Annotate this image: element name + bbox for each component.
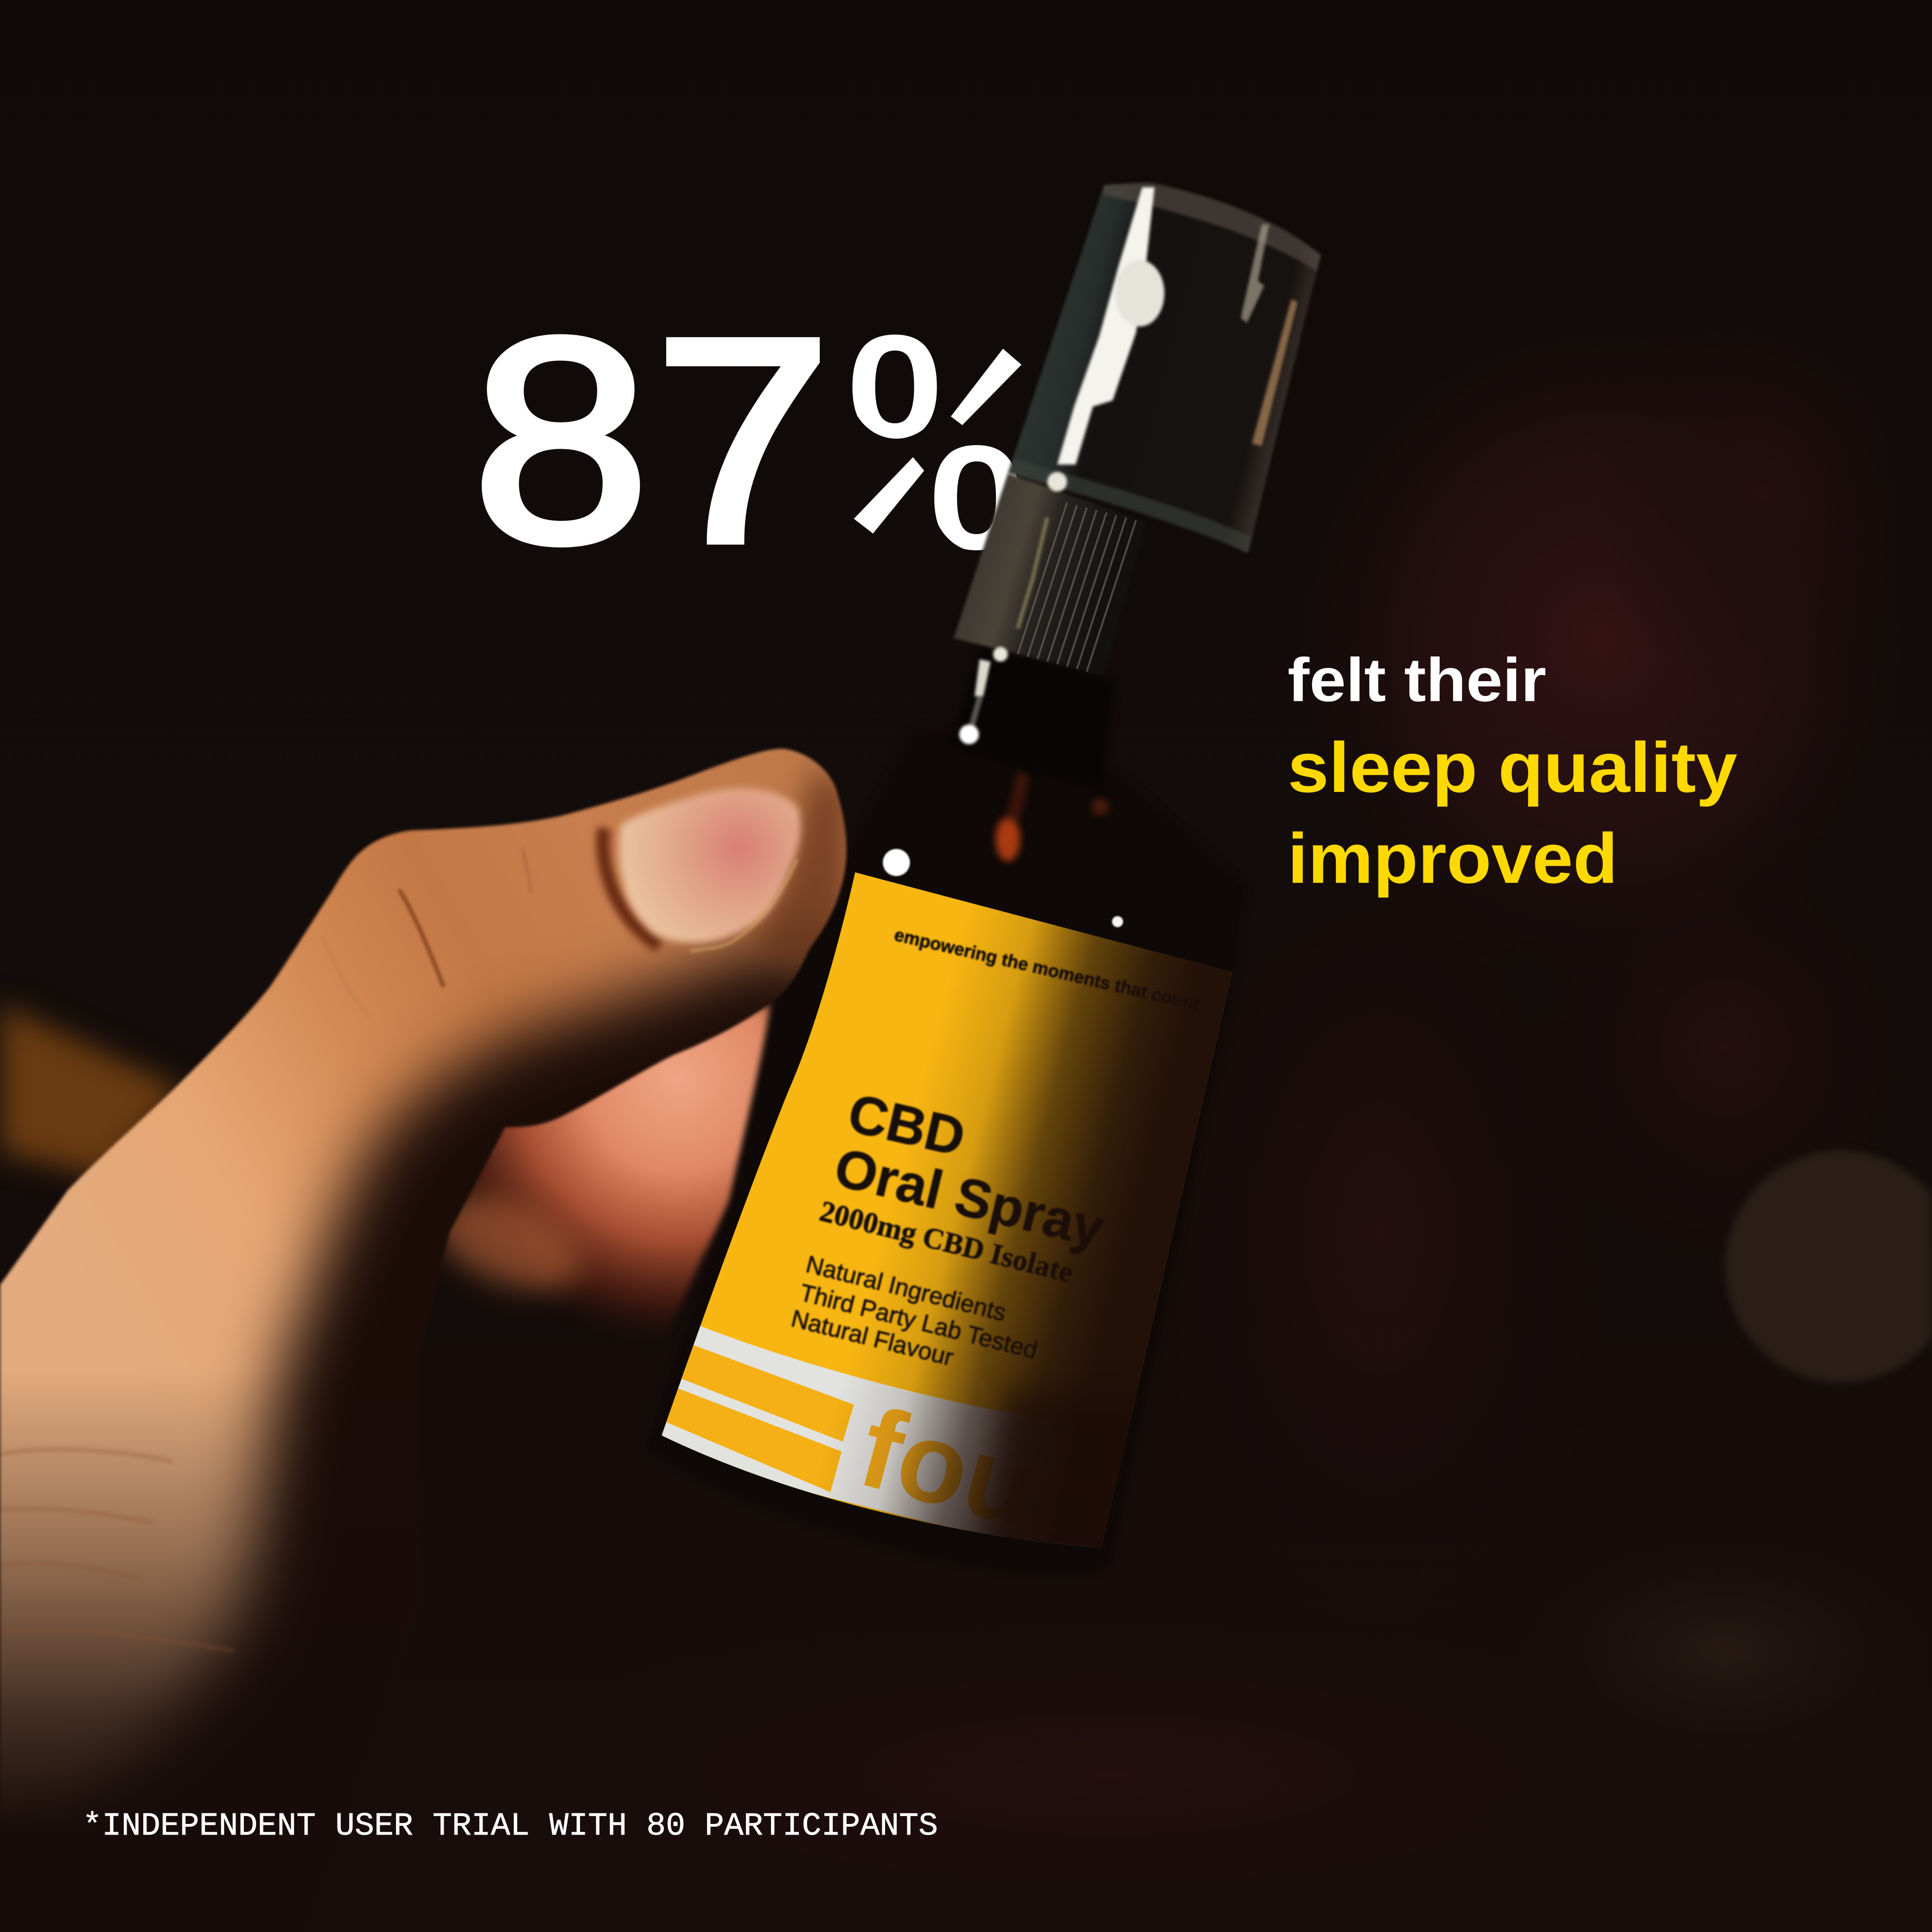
- thumb tip side shade: [752, 764, 850, 973]
- brand wordmark: four: [848, 1384, 1093, 1562]
- knuckle crease: [323, 848, 531, 1016]
- bottle glints: [883, 849, 1123, 927]
- nail edge glare: [690, 859, 797, 951]
- bokeh circle: [1725, 1151, 1932, 1383]
- label text: empowering the moments that count: [893, 925, 1201, 1014]
- text: felt their sleep quality improved: improved: [1288, 819, 1618, 898]
- label text: Natural Flavour: [789, 1305, 956, 1371]
- thumb nail cuticle: [603, 828, 659, 946]
- text: felt their sleep quality improved: sleep quality: [1288, 728, 1737, 807]
- label text: CBD: [842, 1082, 971, 1167]
- ribbed collar: [954, 473, 1147, 675]
- label text: [789, 925, 1201, 1371]
- headline: 87%: %: [845, 288, 1076, 547]
- clear cap: [1008, 182, 1321, 553]
- headline: 87%: [482, 334, 1021, 550]
- label shadow: [641, 850, 1257, 1562]
- blurred orange light on left: [0, 1004, 185, 1177]
- label text: 2000mg CBD Isolate: [816, 1194, 1076, 1289]
- label text: Third Party Lab Tested: [797, 1279, 1040, 1365]
- amber glass glow: [995, 770, 1109, 861]
- text: felt their sleep quality improved: felt their: [1288, 646, 1546, 714]
- hand shadow: [0, 949, 850, 1932]
- bottle body: [647, 727, 1244, 1575]
- label text: Natural Ingredients: [803, 1251, 1009, 1326]
- thumb nail: [619, 788, 800, 943]
- cap highlights: [959, 187, 1297, 744]
- label text: Oral Spray: [829, 1136, 1110, 1259]
- yellow band stripes: [663, 1340, 854, 1492]
- skin folds on back of hand: [0, 1449, 234, 1651]
- hand and thumb: [0, 740, 862, 1932]
- band shadow: [980, 1392, 1146, 1562]
- neck: [949, 647, 1115, 789]
- headline: 87%: %: [795, 338, 1026, 596]
- white label band: [653, 1323, 1109, 1562]
- index finger behind bottle: [419, 1004, 770, 1417]
- headline: 87%: 87: [472, 278, 836, 603]
- yellow label: [641, 850, 1257, 1562]
- footnote: *INDEPENDENT USER TRIAL WITH 80 PARTICIPANTS: [83, 1808, 938, 1844]
- text: felt their sleep quality improved: [1288, 646, 1737, 898]
- spray bottle: [641, 182, 1321, 1575]
